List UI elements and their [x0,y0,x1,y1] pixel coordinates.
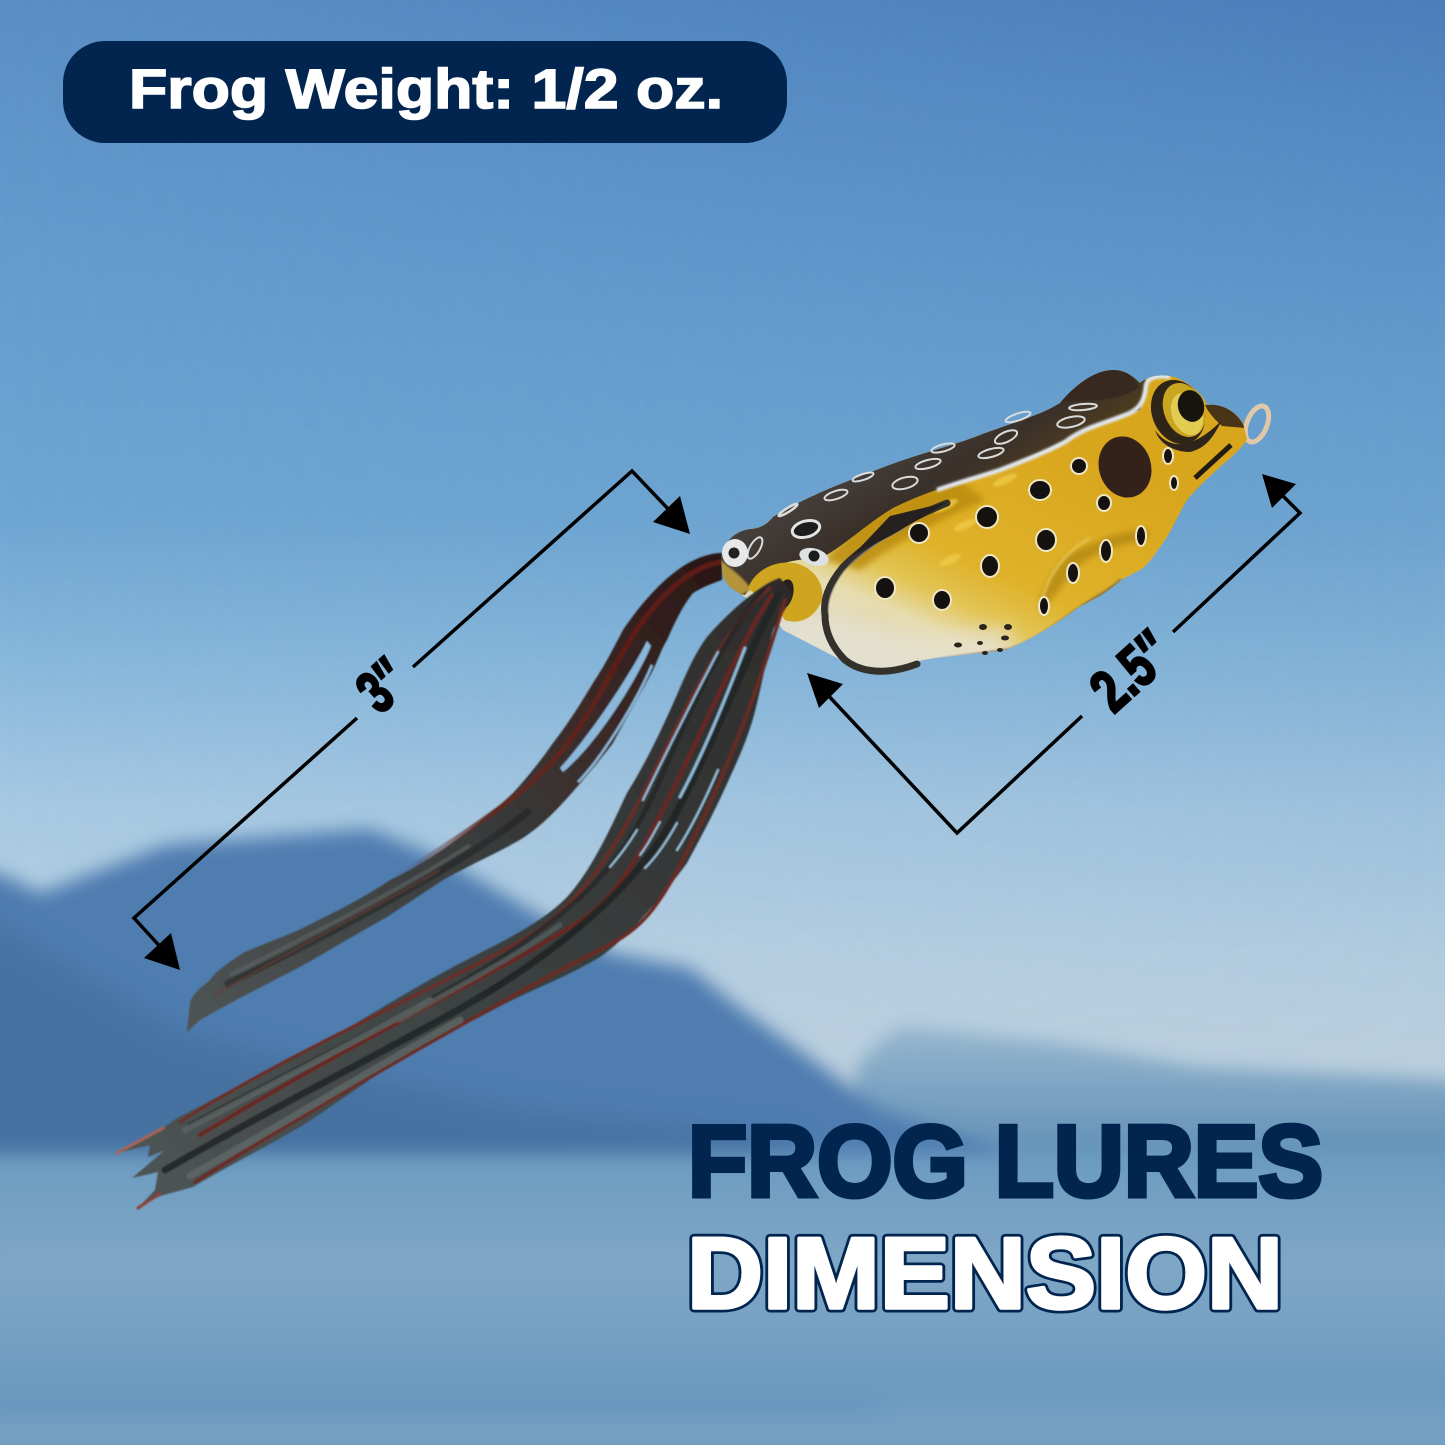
white back line [937,376,1170,490]
belly edge shadow [926,578,1122,660]
dimension arrow: skirt length 3 inches [134,471,690,970]
arrowhead top [653,496,690,534]
dark back [715,360,1150,595]
back spots [745,403,1097,561]
title line two outline: DIMENSION [687,1218,1283,1330]
upper skirt strand [187,553,722,1032]
lower skirt strand bundle [117,578,792,1208]
title line one: FROG LURES [688,1106,1323,1218]
skirt gap slits [560,641,651,772]
arrowhead upper [1262,474,1296,508]
arrowhead lower [807,673,843,708]
hook point [852,502,948,556]
snout top [1205,404,1245,428]
lower skirt gap slits [643,652,718,800]
flank eye spot [797,545,831,569]
eye [1142,372,1222,452]
tail knob base [722,559,752,596]
flank crease [1040,530,1150,612]
mouth line [1195,445,1231,478]
lure line tie ring [1241,403,1273,445]
frog silhouette and shading [722,370,1247,668]
side spots [875,448,1178,615]
weight label pill [63,41,787,143]
tympanum [1091,429,1159,505]
hook shank [825,503,947,671]
label 2.5 inches: 2.5″ [1077,618,1185,724]
belly speckles [954,624,1012,655]
weight text: Frog Weight: 1/2 oz. [129,57,723,120]
hook highlight [828,528,905,612]
gold skirt collar [748,562,823,622]
frog lure body [710,360,1273,690]
skirt exit hole [773,577,797,611]
rear bump eye [722,539,748,567]
dimension arrow: body length 2.5 inches [807,474,1300,833]
title line two: DIMENSION [687,1218,1283,1330]
shoulder gold shading [825,480,985,570]
arrowhead bottom [144,933,180,970]
title [687,1106,1323,1330]
pale under belly [791,618,1020,662]
head dome [1060,370,1139,402]
label 3 inches: 3″ [344,646,421,725]
